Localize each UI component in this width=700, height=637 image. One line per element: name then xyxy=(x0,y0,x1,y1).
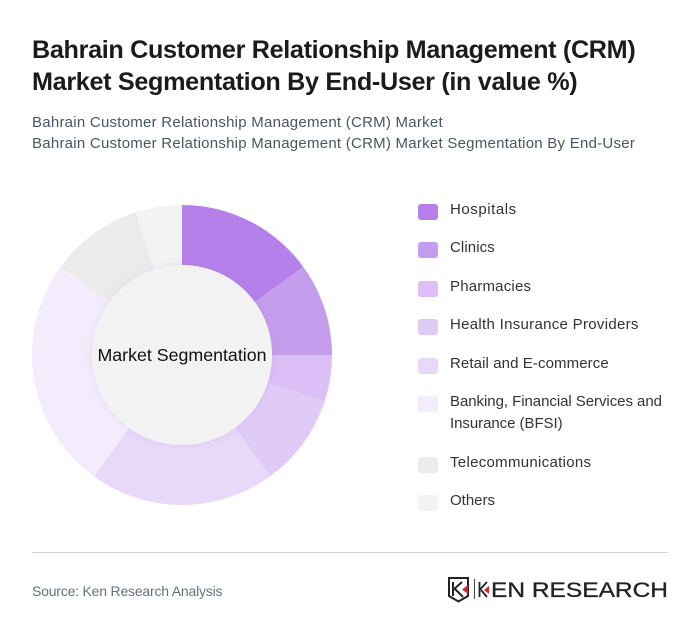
subtitle: Bahrain Customer Relationship Management (CRM) Market Segmentation By End-User xyxy=(32,135,635,152)
legend: Health Insurance Providers xyxy=(450,316,639,333)
legend: Insurance (BFSI) xyxy=(450,415,563,432)
subtitle xyxy=(32,114,635,152)
source note: Source: Ken Research Analysis xyxy=(32,583,222,599)
title xyxy=(32,36,635,96)
legend: Clinics xyxy=(450,239,495,256)
donut chart: Market Segmentation xyxy=(97,345,267,365)
title: Market Segmentation By End-User (in value %) xyxy=(32,68,577,96)
donut chart xyxy=(32,205,332,505)
legend: Pharmacies xyxy=(450,278,531,295)
title: Bahrain Customer Relationship Management (CRM) xyxy=(32,36,635,64)
legend xyxy=(418,201,662,511)
legend: Banking, Financial Services and xyxy=(450,393,662,410)
legend: Others xyxy=(450,492,495,509)
logo: Ken Research: EN RESEARCH xyxy=(491,579,668,602)
logo: Ken Research xyxy=(448,577,668,603)
legend: Hospitals xyxy=(450,201,517,218)
subtitle: Bahrain Customer Relationship Management (CRM) Market xyxy=(32,114,443,131)
legend: Retail and E-commerce xyxy=(450,355,609,372)
legend: Telecommunications xyxy=(450,454,591,471)
